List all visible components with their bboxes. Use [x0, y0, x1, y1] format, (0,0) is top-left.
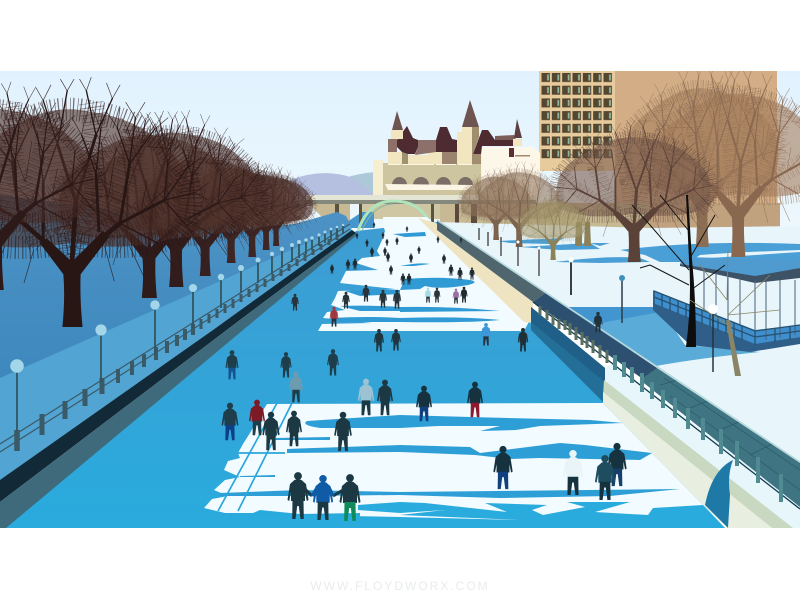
right bank tree shadows: [498, 238, 800, 263]
distant skaters: [330, 222, 475, 285]
lower sunlit snow on ice: [204, 403, 725, 528]
ice rink grid lines: [218, 403, 292, 511]
illustration: Rideau Canal skating scene: [0, 65, 800, 528]
left lamp posts: [10, 224, 344, 431]
cream west wing: [373, 160, 384, 195]
olive stripe: [603, 380, 793, 528]
mid-distance skaters: [225, 285, 603, 402]
right bank trees: [457, 65, 800, 262]
cream canal bank upper: [418, 218, 533, 323]
olive trunks: [575, 222, 591, 246]
upper sunlit snow on ice: [318, 217, 531, 331]
promenade walkway: [437, 220, 800, 509]
shaded canal wall: [531, 307, 605, 402]
cut-off tree at left edge: [0, 82, 109, 290]
sky: [0, 71, 800, 232]
east spire: [514, 119, 522, 138]
arch over the canal: [358, 201, 433, 231]
bridge deck: [306, 195, 536, 226]
stone facade: [383, 163, 481, 196]
tan walls behind bridge: [309, 203, 780, 228]
central tower: [472, 127, 481, 164]
olive tree: [517, 192, 590, 260]
maroon east roof: [495, 135, 516, 140]
left tree row: [0, 77, 319, 327]
right railing posts: [540, 306, 781, 502]
maroon west roof: [397, 126, 418, 154]
grey teal wall face: [0, 233, 358, 528]
main spire: [462, 100, 479, 127]
right snow bank: [437, 222, 800, 470]
watermark credit: WWW.FLOYDWORX.COM: [310, 579, 490, 593]
foreground thin black tree: [632, 195, 725, 347]
west spire: [392, 111, 403, 130]
cornice ticks: [388, 164, 472, 165]
left fence rails: [0, 224, 350, 452]
fence posts: [14, 430, 20, 451]
middle tree two: [48, 111, 251, 298]
tower windows: [542, 73, 614, 161]
tall tree group: [615, 65, 790, 247]
small tree one: [457, 167, 536, 240]
pavilion glass posts: [692, 268, 795, 345]
front white lamp: [708, 304, 718, 372]
walkway outer line: [437, 220, 800, 462]
arched windows: [392, 177, 473, 185]
roof lower blocks: [388, 152, 442, 164]
blue ice under bridge: [348, 212, 374, 228]
dark tree: [547, 119, 722, 262]
Chateau Laurier: [373, 100, 540, 197]
white ledge: [385, 184, 475, 190]
bottom blue ice edge: [240, 502, 725, 528]
small tree two: [473, 161, 566, 247]
maroon central roof: [436, 127, 457, 152]
big foreground tree: [0, 77, 208, 327]
canal ice surface: [0, 222, 725, 528]
hand-holding trio: [288, 472, 360, 521]
blue shadow streaks on lower snow: [220, 415, 680, 498]
foreground olive thin tree: [690, 250, 780, 376]
right bank lamp posts: [479, 228, 625, 323]
office tower: [539, 71, 777, 203]
left bank light walkway: [0, 224, 352, 482]
skating pavilion: [653, 257, 800, 352]
cream face: [603, 392, 772, 528]
white east wing: [482, 147, 540, 180]
blue shadow streaks on upper snow: [330, 232, 500, 322]
dark canal retaining wall: [0, 230, 356, 502]
blue wedge shadow: [705, 460, 733, 528]
middle tree three: [81, 110, 273, 287]
blue shaded snow in front of pavilion: [567, 307, 760, 366]
pavilion railing: [654, 291, 800, 345]
pavilion deck: [653, 290, 800, 345]
pavilion roof: [680, 257, 800, 276]
snowy top of embankment: [605, 364, 800, 528]
lower right embankment: [603, 364, 800, 528]
left bank upper field: [0, 195, 352, 380]
foreground skaters: [222, 379, 627, 521]
far trees: [234, 168, 319, 246]
walkway base line: [533, 302, 800, 509]
distant hills: [290, 172, 376, 197]
grey mansard: [388, 139, 436, 155]
